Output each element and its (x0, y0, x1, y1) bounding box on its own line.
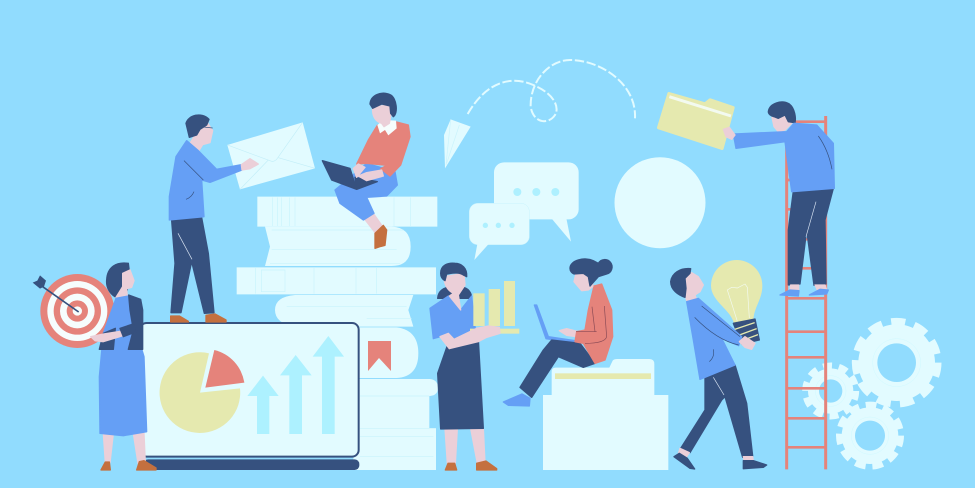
hair (370, 93, 396, 117)
ladder (787, 116, 826, 469)
hair (107, 263, 130, 300)
lower folder (543, 395, 668, 470)
woman holding bar chart (430, 263, 519, 470)
sweater (357, 122, 410, 176)
legs (364, 213, 385, 237)
dress (99, 296, 147, 436)
hair (570, 259, 612, 286)
trousers (335, 163, 397, 220)
hair (768, 102, 795, 123)
collar (377, 120, 397, 135)
sweater (733, 123, 834, 192)
small bubble (469, 203, 529, 260)
man carrying light bulb (671, 260, 767, 469)
bookmark (368, 341, 391, 371)
pie chart (160, 350, 244, 433)
legs (445, 428, 485, 463)
laptop with charts (140, 323, 359, 470)
arm (440, 326, 500, 349)
laptop (322, 161, 377, 189)
ankles (790, 285, 827, 292)
target (33, 274, 114, 348)
face (683, 273, 703, 301)
face (574, 272, 593, 291)
shoes (375, 225, 387, 248)
hand (739, 337, 755, 349)
hair (186, 115, 209, 137)
laptop screen (140, 323, 359, 457)
folder held by man (659, 94, 733, 148)
hand (559, 329, 578, 337)
hands (353, 164, 383, 181)
large circle (614, 157, 706, 248)
woman with target (33, 263, 156, 470)
face (116, 270, 134, 301)
paper plane with dashed flight path (444, 60, 635, 168)
hair (671, 269, 691, 297)
shoe (503, 394, 530, 406)
sweater (575, 284, 613, 363)
blouse (430, 296, 477, 342)
yellow stripe (555, 373, 651, 379)
laptop base (143, 459, 359, 470)
hand (723, 127, 735, 139)
upper folder (552, 359, 654, 397)
dashed flight path (468, 60, 635, 121)
file folder boxes (543, 359, 668, 470)
legs (171, 218, 214, 313)
man on ladder (723, 102, 834, 296)
laptop (534, 305, 579, 343)
man with envelope (169, 115, 315, 322)
lower hair (438, 287, 472, 298)
face (444, 273, 465, 310)
skirt (438, 339, 483, 429)
envelope (227, 122, 315, 189)
hair (441, 263, 467, 281)
jacket (99, 295, 143, 349)
rising arrows (247, 336, 344, 434)
sweater (687, 298, 742, 379)
ankles (678, 448, 753, 462)
arm (91, 331, 122, 342)
face (772, 113, 792, 132)
light bulb (711, 260, 762, 344)
bar chart (470, 281, 519, 334)
speech bubbles (469, 162, 579, 260)
gears (805, 322, 937, 466)
legs and shoes (101, 433, 156, 470)
large bubble (494, 162, 579, 242)
face (190, 123, 213, 150)
trousers (788, 188, 833, 285)
shoes (445, 461, 497, 470)
shoes (674, 453, 767, 469)
trousers (681, 365, 753, 457)
face (373, 105, 392, 127)
glasses (201, 127, 213, 128)
stack of books (237, 197, 438, 470)
paper plane (444, 119, 471, 168)
hand (241, 159, 258, 170)
woman with laptop on books (322, 93, 410, 248)
shoes (171, 314, 226, 322)
shoes (780, 289, 828, 296)
sweater (169, 141, 242, 220)
trousers (520, 340, 595, 397)
seated woman with laptop (503, 259, 613, 406)
